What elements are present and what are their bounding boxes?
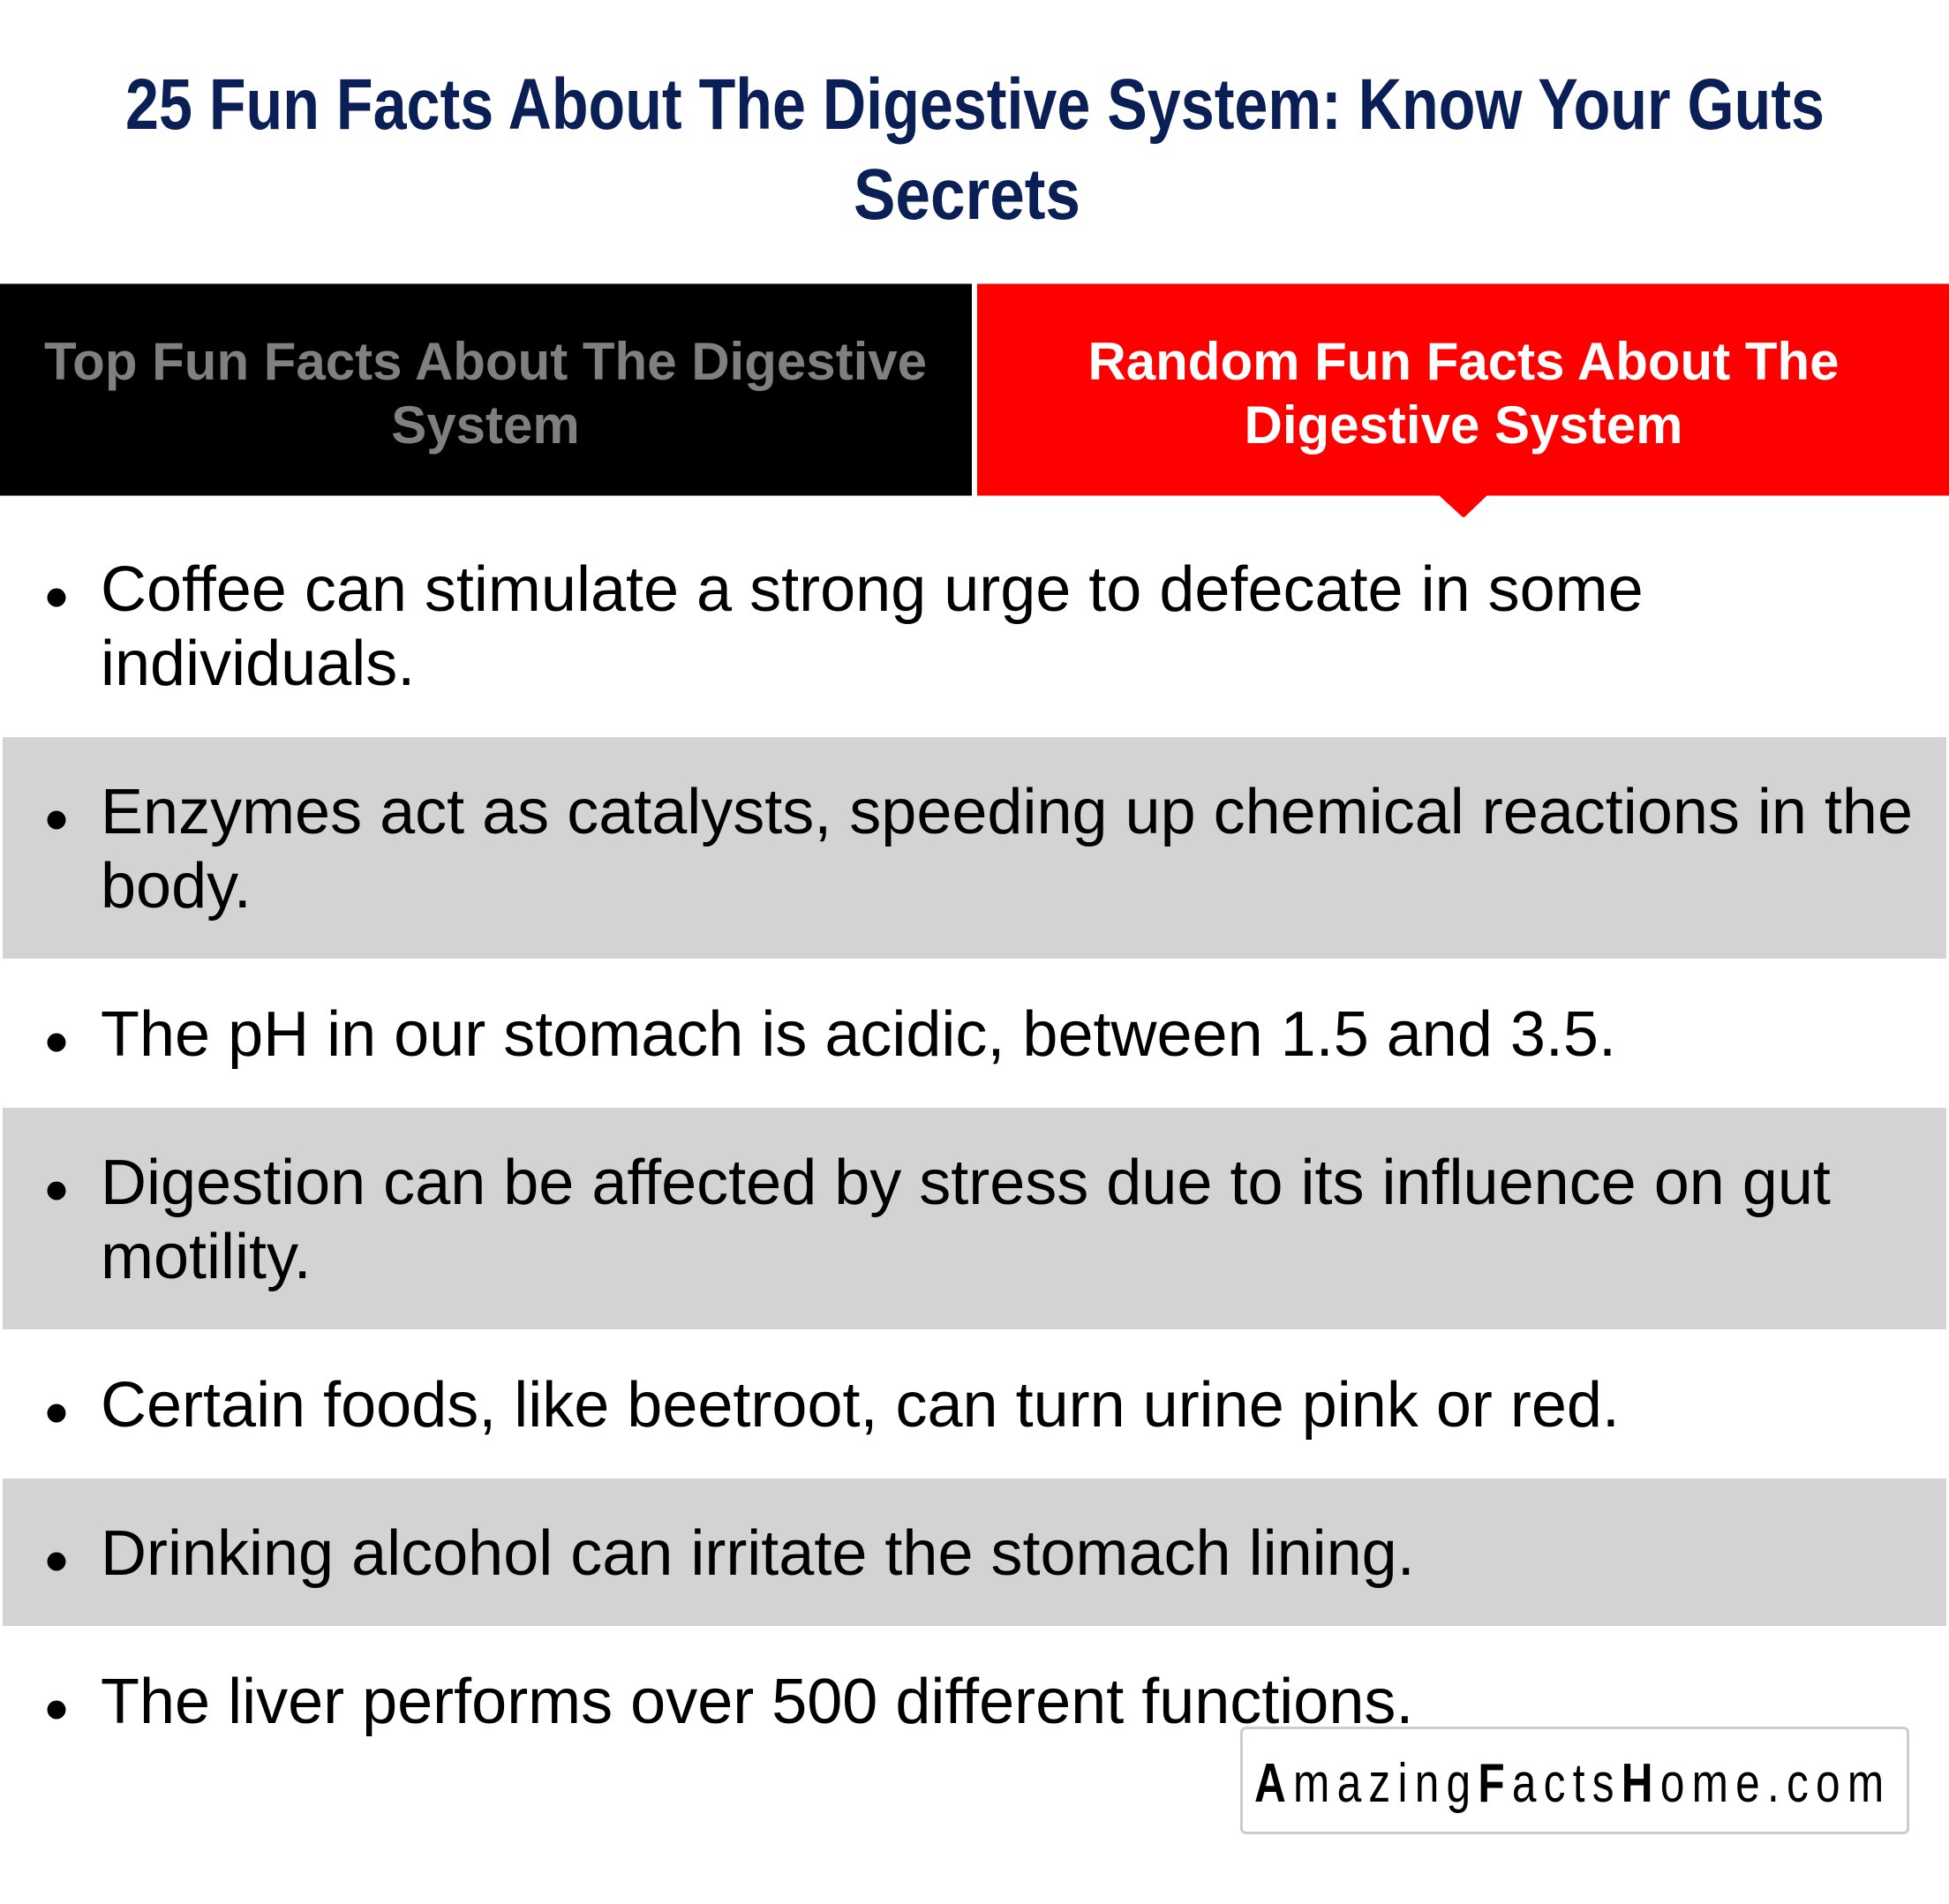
title (125, 64, 1825, 235)
tab heading: top fun facts: System (391, 395, 580, 455)
fact row 1: coffee: individuals. (101, 628, 415, 699)
fact list (3, 554, 1946, 1737)
fact row 6: alcohol: Drinking alcohol can irritate the stomach lining. (101, 1518, 1415, 1589)
fact row 4: stress: Digestion can be affected by stress due to its influence on gut (101, 1148, 1831, 1218)
fact row 7: liver: The liver performs over 500 different functions. (101, 1667, 1413, 1737)
tab heading: random fun facts: Digestive System (1245, 395, 1682, 455)
fact row 2: enzymes: body. (101, 851, 252, 922)
tab heading: random fun facts: Random Fun Facts About The (1087, 332, 1840, 391)
fact row 6: alcohol (3, 1479, 1946, 1626)
fact row 5: beetroot: Certain foods, like beetroot, can turn urine pink or red. (101, 1370, 1620, 1441)
fact row 1: coffee: Coffee can stimulate a strong urge to defecate in some (101, 554, 1644, 625)
fact row 4: stress (3, 1108, 1946, 1329)
tab pointer arrow (1439, 495, 1487, 517)
tab heading: random fun facts (1087, 332, 1840, 455)
fact row 4: stress: motility. (101, 1222, 312, 1292)
fact row 3: stomach pH: The pH in our stomach is acidic, between 1.5 and 3.5. (101, 999, 1616, 1070)
tab heading: top fun facts: Top Fun Facts About The Digestive (44, 332, 927, 391)
fact row 2: enzymes: Enzymes act as catalysts, speeding up chemical reactions in the (101, 777, 1913, 847)
panel: active tab, random fun facts (977, 284, 1949, 517)
panel: inactive tab, top fun facts (0, 284, 972, 496)
watermark badge (1241, 1728, 1908, 1833)
watermark text: AmazingFactsHome.com (1254, 1752, 1891, 1813)
fact row 1: coffee (48, 554, 1644, 699)
title: Secrets (854, 154, 1080, 235)
fact row 2: enzymes (3, 737, 1946, 959)
tab heading: top fun facts (44, 332, 927, 455)
